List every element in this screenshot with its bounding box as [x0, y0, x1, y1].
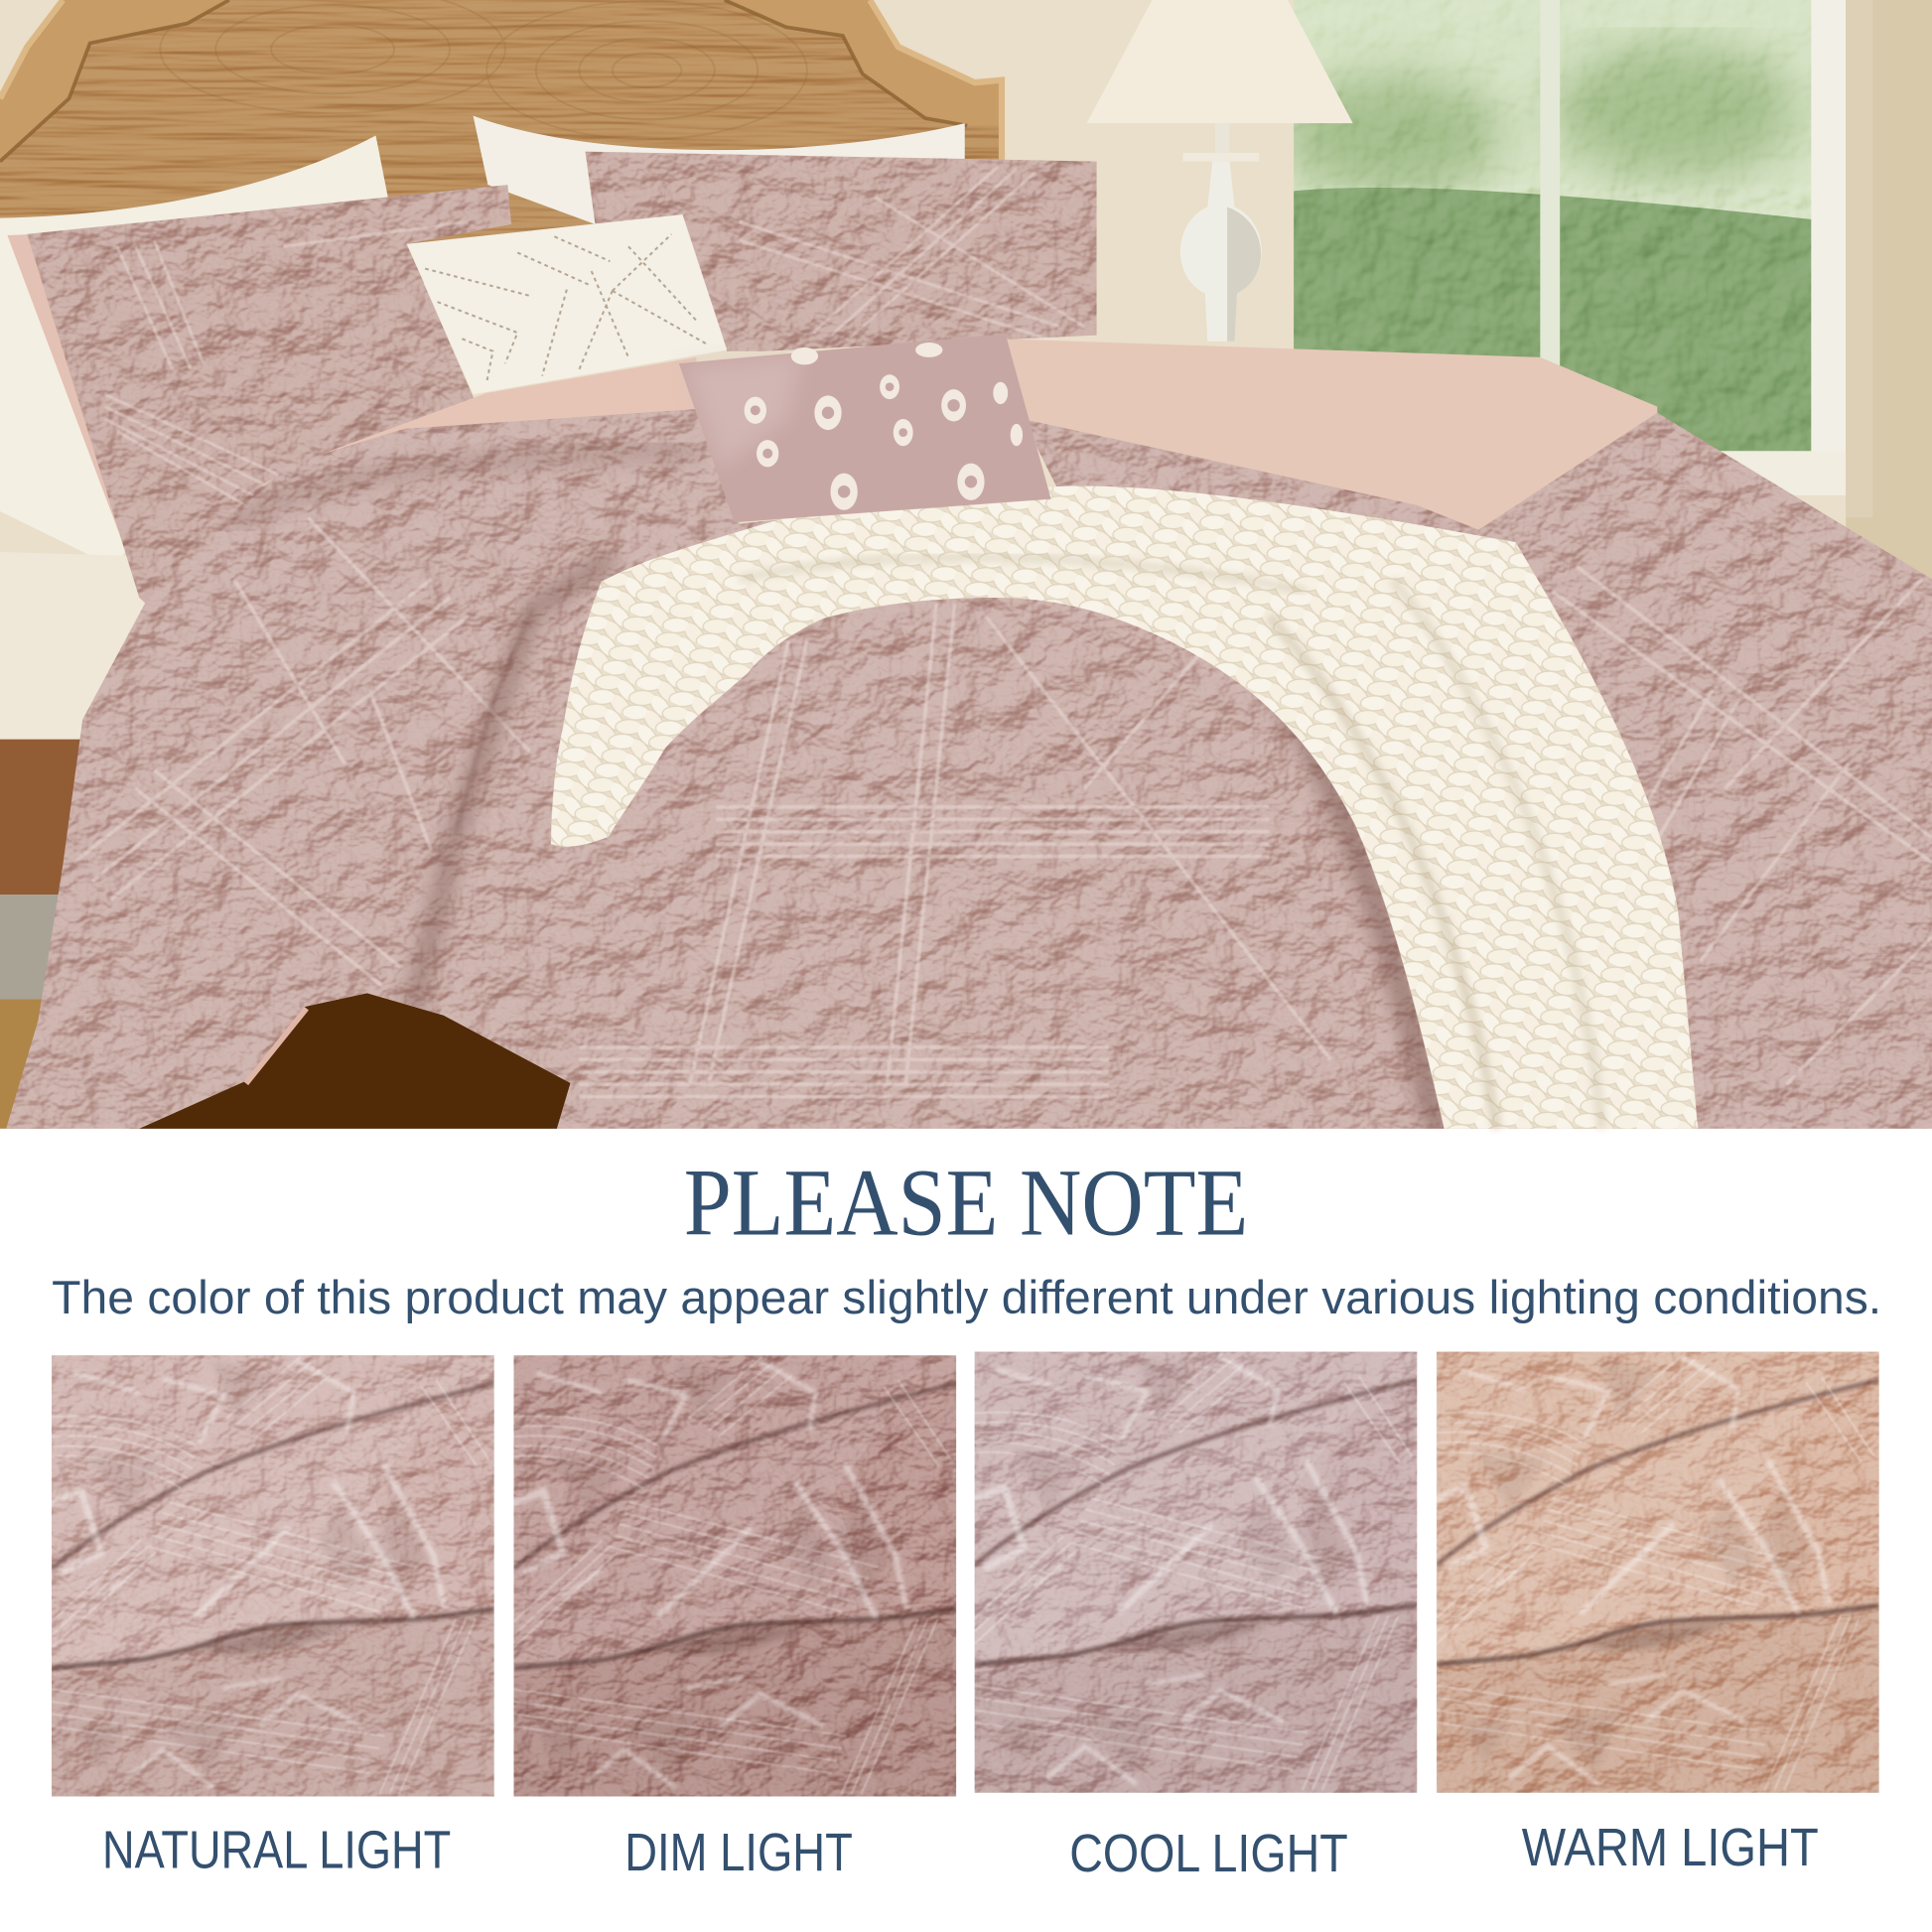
white back pillows: [0, 116, 965, 569]
label: natural light: NATURAL LIGHT: [102, 1821, 451, 1879]
wall: [0, 0, 1932, 690]
shadow folds: [234, 450, 1436, 1121]
chunky knit throw blanket: [551, 486, 1698, 1129]
panel: natural light swatch: [52, 1355, 494, 1796]
subtitle note: The color of this product may appear slightly different under various lighting conditions.: [52, 1271, 1881, 1323]
lower right wall: [1846, 0, 1932, 617]
panel: dim light swatch: [514, 1355, 956, 1796]
hero bedroom photo: [0, 0, 1932, 1134]
label: dim light: DIM LIGHT: [624, 1824, 853, 1882]
white decorative pillow: [407, 214, 727, 394]
panel: warm light swatch: [1437, 1351, 1879, 1793]
comforter reverse side, peach: [259, 339, 1657, 542]
bed sheet, floor and frame at left: [0, 552, 571, 1129]
bedside lamp: [1087, 0, 1353, 342]
stitched diamond bands: [73, 517, 1932, 1097]
small embroidered pink pillow: [679, 334, 1051, 522]
pink pillow shams: [8, 151, 1096, 604]
wooden headboard: [0, 0, 1004, 283]
title: PLEASE NOTE: [684, 1150, 1248, 1256]
label: warm light: WARM LIGHT: [1522, 1819, 1819, 1877]
panel: cool light swatch: [975, 1351, 1417, 1793]
label: cool light: COOL LIGHT: [1069, 1825, 1348, 1883]
main comforter: [0, 407, 1932, 1134]
window with garden view: [1282, 0, 1872, 517]
